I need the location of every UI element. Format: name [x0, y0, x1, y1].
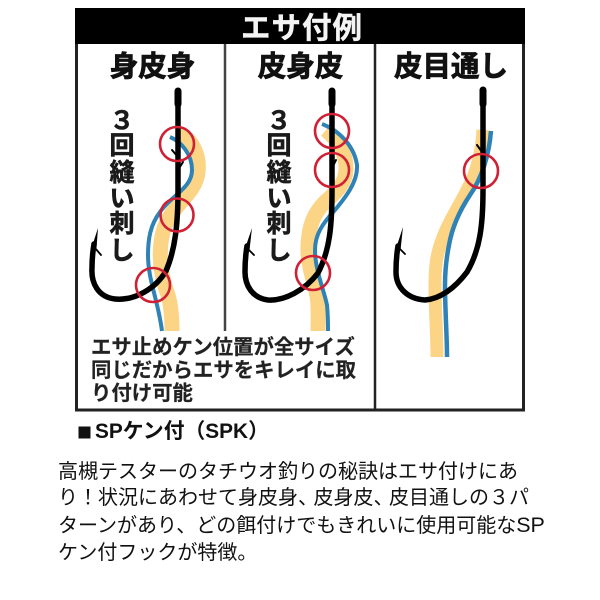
column 2 vertical label: い	[266, 185, 292, 213]
column 2 vertical label: 縫	[266, 159, 292, 187]
column 2 marker circles	[296, 114, 349, 290]
diagram: bait rigging examples	[75, 8, 525, 412]
caption inside panel: エサ止めケン位置が全サイズ	[91, 335, 355, 359]
column 1 bait strip	[148, 134, 198, 331]
column 1 vertical label: し	[109, 237, 135, 265]
column 2 vertical label: し	[266, 237, 292, 265]
caption inside panel	[91, 335, 357, 405]
column 1 marker circles	[136, 127, 194, 302]
column divider left	[224, 44, 226, 331]
column 3: 皮目通し	[394, 51, 508, 357]
column 1 vertical label: 刺	[109, 210, 135, 238]
column 2 heading: 皮身皮	[258, 51, 343, 83]
description text: り！状況にあわせて身皮身、皮身皮、皮目通しの３パ	[58, 487, 529, 509]
column 3 heading: 皮目通し	[394, 51, 508, 83]
header bar: エサ付例	[241, 12, 363, 45]
subheading: ■	[77, 422, 92, 443]
column 3 bait strip	[435, 130, 491, 357]
description text: 高槻テスターのタチウオ釣りの秘訣はエサ付けにあ	[58, 460, 518, 482]
column 1 vertical label: 縫	[109, 159, 135, 187]
column 1 vertical label: 回	[109, 132, 135, 160]
column 2 hook	[244, 91, 336, 300]
column 2 bait strip	[308, 124, 357, 331]
subheading: SPケン付（SPK）	[95, 420, 269, 443]
description text: ケン付フックが特徴。	[58, 542, 257, 564]
description text	[58, 460, 545, 564]
column 3 hook	[396, 90, 483, 300]
column 1 vertical label	[109, 107, 135, 265]
column 2 vertical label	[266, 107, 292, 265]
column 1 vertical label: い	[109, 185, 135, 213]
column 1 hook	[92, 91, 183, 299]
caption inside panel: り付け可能	[91, 382, 193, 405]
column 1 heading: 身皮身	[110, 51, 195, 83]
description text: ターンがあり、どの餌付けでもきれいに使用可能なSP	[58, 513, 545, 537]
column 2: 皮身皮	[244, 51, 357, 331]
panel frame	[76, 20, 524, 410]
header bar	[75, 8, 525, 45]
column 1: 身皮身	[92, 51, 198, 331]
column 3 marker circle	[464, 154, 498, 188]
column 2 vertical label: 回	[266, 132, 292, 160]
column 2 vertical label: ３	[266, 107, 292, 135]
column divider right	[374, 44, 376, 410]
column 2 vertical label: 刺	[266, 210, 292, 238]
column 1 vertical label: ３	[109, 107, 135, 135]
caption inside panel: 同じだからエサをキレイに取	[91, 359, 357, 382]
